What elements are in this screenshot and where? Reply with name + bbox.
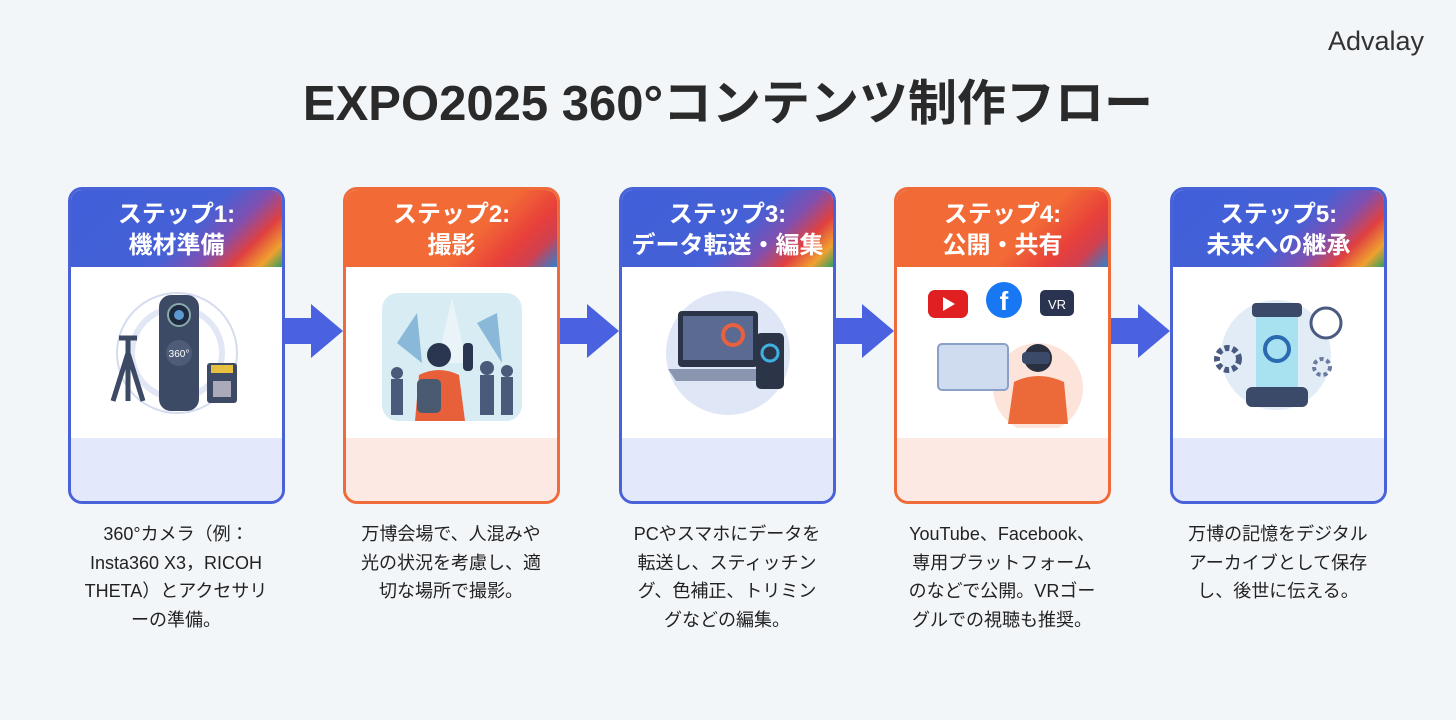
icon: archive capsule [1173, 267, 1384, 438]
text: step 2 description [361, 524, 541, 601]
header 1 [71, 190, 282, 267]
icon: youtube facebook VR: VR [1047, 296, 1066, 312]
header 2: ステップ2: [393, 201, 510, 228]
text: step 4 description: グルでの視聴も推奨。 [912, 610, 1092, 630]
text: step 4 description [909, 524, 1095, 630]
arrow 4 [1111, 304, 1170, 358]
header 5: 未来への継承 [1206, 232, 1350, 259]
text: step 1 description: Insta360 X3，RICOH [90, 552, 262, 572]
text: step 1 description: ーの準備。 [131, 610, 221, 630]
text: step 3 description: グ、色補正、トリミン [638, 581, 816, 601]
panel: step 2 [343, 187, 560, 504]
text: step 3 description: PCやスマホにデータを [634, 524, 820, 544]
panel: step 4 [894, 187, 1111, 504]
text: step 3 description: 転送し、スティッチン [638, 552, 816, 572]
header 3: ステップ3: [669, 201, 786, 228]
icon: youtube facebook VR: f [999, 286, 1008, 316]
text: step 5 description [1188, 524, 1368, 601]
header 4: 公開・共有 [942, 232, 1062, 259]
text: step 4 description: 専用プラットフォーム [912, 552, 1092, 572]
header 3: データ転送・編集 [632, 232, 824, 259]
header 5: ステップ5: [1220, 201, 1337, 228]
header 2 [346, 190, 557, 267]
text: step 3 description [634, 524, 820, 630]
arrow 1 [285, 304, 343, 358]
panel: step 3 [619, 187, 836, 504]
icon: camera & tripod: 360° [168, 348, 189, 360]
text: step 3 description: グなどの編集。 [664, 610, 790, 630]
arrow 2 [560, 304, 619, 358]
header 4: ステップ4: [944, 201, 1061, 228]
text: step 5 description: し、後世に伝える。 [1197, 581, 1359, 601]
logo: Advalay [1328, 26, 1424, 56]
text: step 5 description: アーカイブとして保存 [1189, 552, 1367, 572]
text: step 1 description: 360°カメラ（例： [103, 524, 249, 544]
arrow 3 [836, 304, 894, 358]
text: step 4 description: YouTube、Facebook、 [909, 524, 1095, 544]
icon: laptop & phone [622, 267, 833, 438]
header 1: ステップ1: [118, 201, 235, 228]
header 1: 機材準備 [128, 232, 224, 259]
text: step 1 description [85, 524, 267, 630]
icon: camera & tripod [71, 267, 282, 438]
panel: step 5 [1170, 187, 1387, 504]
icon: shooting at expo [346, 267, 557, 438]
text: step 2 description: 切な場所で撮影。 [379, 581, 523, 601]
header 2: 撮影 [428, 232, 476, 259]
header 5 [1173, 190, 1384, 267]
icon: youtube facebook VR [897, 267, 1108, 438]
header 4 [897, 190, 1108, 267]
text: step 1 description: THETA）とアクセサリ [85, 581, 267, 601]
text: step 2 description: 光の状況を考慮し、適 [361, 552, 541, 572]
text: step 2 description: 万博会場で、人混みや [361, 524, 541, 544]
text: step 4 description: のなどで公開。VRゴー [909, 581, 1095, 601]
panel: step 1 [68, 187, 285, 504]
text: step 5 description: 万博の記憶をデジタル [1188, 524, 1368, 544]
title: EXPO2025 360°コンテンツ制作フロー [303, 77, 1153, 131]
header 3 [622, 190, 833, 267]
